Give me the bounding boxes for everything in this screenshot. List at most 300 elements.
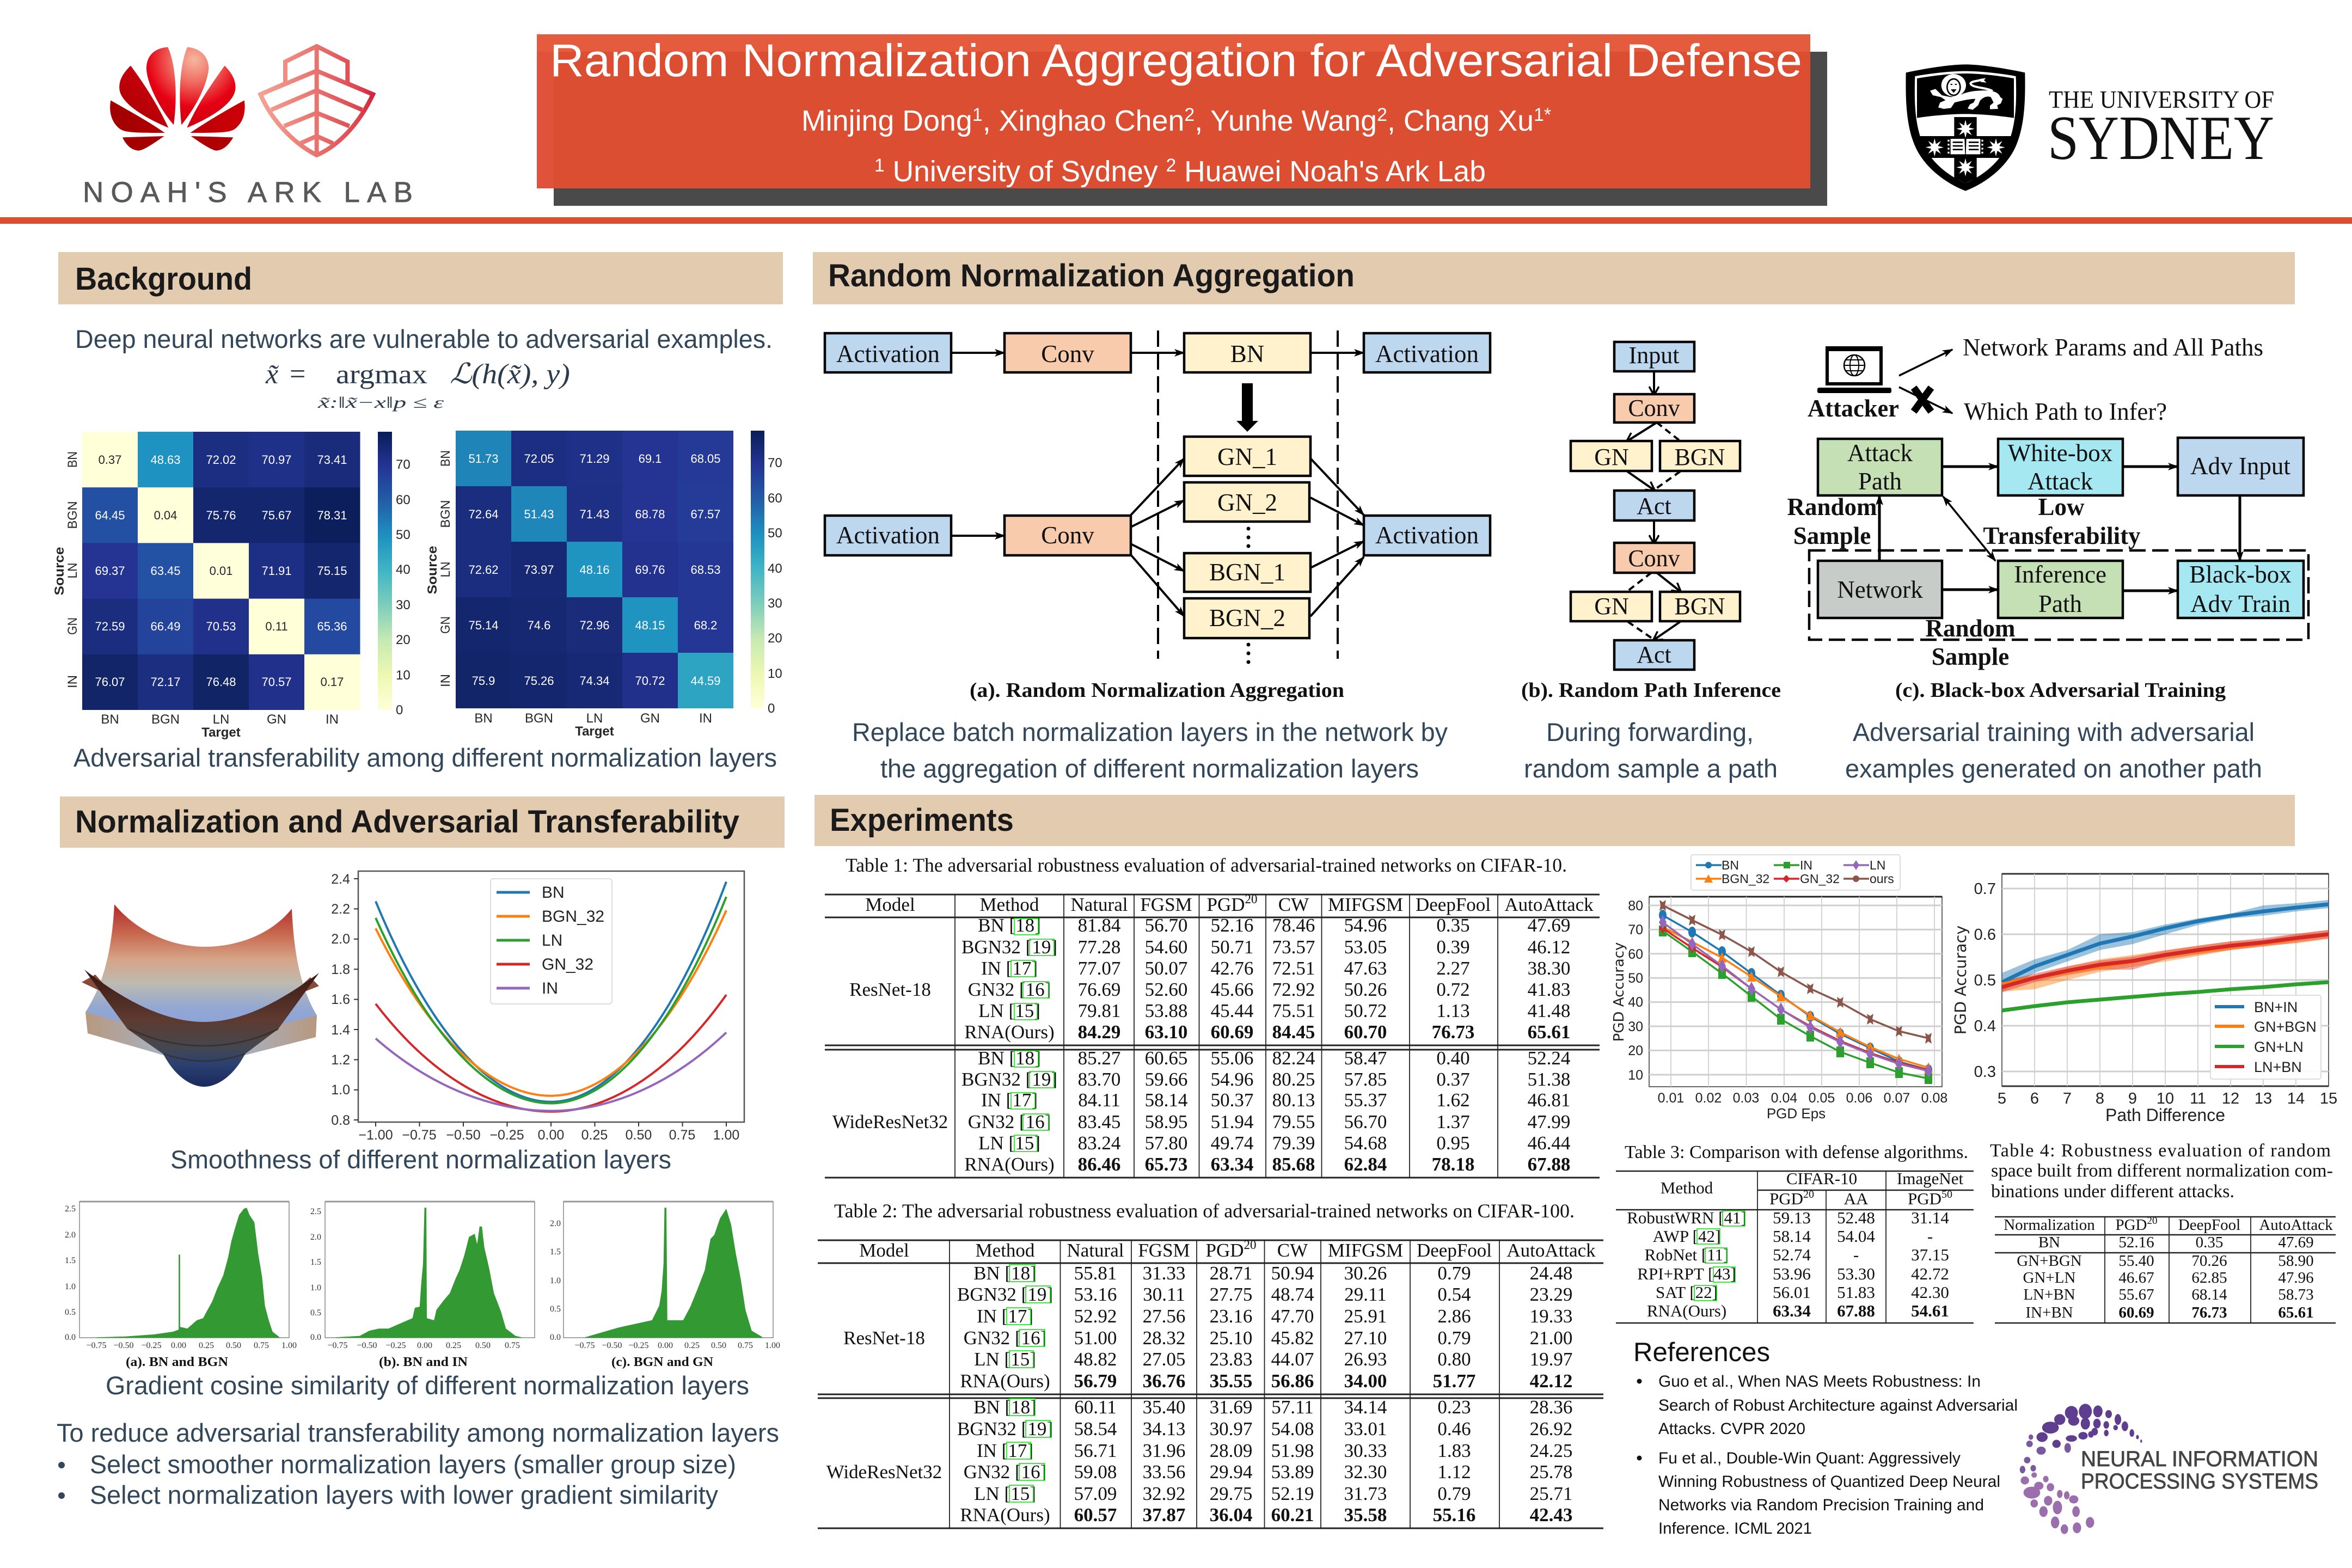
table 2: 31.33 xyxy=(1143,1263,1185,1284)
legend: LN xyxy=(542,932,562,950)
table 1: IN [17] xyxy=(981,1089,1038,1111)
table 1: FGSM xyxy=(1140,894,1192,915)
colorbar: 70 xyxy=(768,456,782,470)
heatmap: right: 75.9 xyxy=(472,674,495,688)
table 2: 24.25 xyxy=(1530,1440,1572,1461)
table 1: 84.29 xyxy=(1078,1021,1120,1043)
table 1: PGD xyxy=(1206,894,1245,915)
heatmap: left: BGN xyxy=(65,501,80,529)
table 2: AutoAttack xyxy=(1506,1240,1596,1261)
histogram c: 0.50 xyxy=(711,1341,726,1350)
table 2: 42.43 xyxy=(1530,1504,1572,1526)
table 2: 45.82 xyxy=(1271,1327,1314,1349)
table 1: 53.88 xyxy=(1145,1000,1187,1021)
legend: GN_32 xyxy=(542,955,593,973)
diagram c: black-box adversarial training: Adv Input xyxy=(2190,452,2290,480)
table 1: 58.14 xyxy=(1145,1089,1187,1111)
histogram c: 0.5 xyxy=(550,1304,561,1314)
line chart: PGD accuracy vs path difference: 8 xyxy=(2096,1090,2104,1107)
heatmap: left: 71.91 xyxy=(261,564,292,578)
diagram a: normalization aggregation: Activation xyxy=(836,522,940,549)
legend: GN_32 xyxy=(1800,872,1840,886)
caption: Adversarial transferability among different normalization layers xyxy=(74,743,777,772)
histogram b: 0.75 xyxy=(505,1341,520,1350)
histogram a: 1.00 xyxy=(281,1341,297,1350)
histogram c: 0.25 xyxy=(684,1341,700,1350)
table 1: 62.84 xyxy=(1344,1154,1387,1175)
table 1: 54.96 xyxy=(1344,915,1387,936)
table 1: 51.94 xyxy=(1211,1111,1253,1132)
legend: BN xyxy=(542,884,565,902)
table 1: 0.95 xyxy=(1436,1132,1470,1154)
legend: BGN_32 xyxy=(542,908,604,926)
table 2: Natural xyxy=(1067,1240,1124,1261)
diagram b: random path inference xyxy=(1521,342,1781,702)
histogram c: 0.75 xyxy=(738,1341,753,1350)
table 2: 37.87 xyxy=(1143,1504,1185,1526)
icon: cross xyxy=(1914,388,1931,412)
logo: University of Sydney xyxy=(1906,64,2274,191)
heatmap: right: GN xyxy=(438,616,453,634)
authors: 2 xyxy=(1184,105,1195,125)
heatmap: right: Source xyxy=(425,546,440,595)
diagram a: normalization aggregation: BGN_2 xyxy=(1209,604,1285,632)
authors: 1 xyxy=(972,105,983,125)
heatmap: right: 72.62 xyxy=(468,563,499,577)
table 1: 67.88 xyxy=(1528,1154,1570,1175)
heatmap: right: 48.16 xyxy=(579,563,610,577)
table 2: 57.11 xyxy=(1271,1396,1314,1418)
heatmap: left: 65.36 xyxy=(317,620,347,633)
line chart: PGD accuracy vs eps: 0.07 xyxy=(1884,1091,1910,1106)
description b xyxy=(1524,718,1778,783)
table 4: 68.14 xyxy=(2191,1286,2227,1303)
references: Attacks. CVPR 2020 xyxy=(1658,1420,1805,1438)
heatmap: right: 72.64 xyxy=(468,507,499,521)
references: Inference. ICML 2021 xyxy=(1658,1520,1812,1538)
heading bar xyxy=(813,252,2295,304)
table 2: 25.10 xyxy=(1210,1327,1252,1349)
table 1: 52.60 xyxy=(1145,979,1187,1000)
diagram c: black-box adversarial training: Network xyxy=(1837,576,1923,603)
table 1: BGN32 [19] xyxy=(961,936,1057,958)
table 2: 0.79 xyxy=(1437,1263,1471,1284)
table 4: 62.85 xyxy=(2191,1269,2227,1287)
table 2: LN [15] xyxy=(974,1349,1036,1370)
line chart: PGD accuracy vs path difference: 14 xyxy=(2287,1090,2305,1107)
table 1: 77.28 xyxy=(1078,936,1120,958)
legend: LN+BN xyxy=(2254,1059,2302,1075)
table 1: MIFGSM xyxy=(1328,894,1403,915)
table 3: 58.14 xyxy=(1773,1227,1811,1246)
table 4: 46.67 xyxy=(2118,1269,2154,1287)
table 2: DeepFool xyxy=(1417,1240,1492,1261)
caption c: (c). BGN and GN xyxy=(611,1355,714,1369)
heatmap: right: 75.14 xyxy=(468,618,499,632)
table 3: 54.61 xyxy=(1911,1301,1949,1320)
colorbar: 60 xyxy=(396,493,411,507)
heatmap: right: Target xyxy=(575,724,614,739)
table 3: - xyxy=(1853,1245,1859,1264)
authors: , Chang Xu xyxy=(1387,105,1534,137)
table 1: 63.10 xyxy=(1145,1021,1187,1043)
table 2: 50.94 xyxy=(1271,1263,1314,1284)
table 2: PGD xyxy=(1205,1240,1244,1261)
table 1: 56.70 xyxy=(1344,1111,1387,1132)
table 2: 23.83 xyxy=(1210,1349,1252,1370)
colorbar xyxy=(378,432,411,718)
line chart: smoothness: 0.75 xyxy=(669,1128,695,1143)
table 1: 54.96 xyxy=(1211,1069,1253,1090)
takeaways: Select smoother normalization layers (smaller group size) xyxy=(90,1450,736,1479)
heatmap: left: IN xyxy=(65,675,80,688)
table 1: Natural xyxy=(1071,894,1128,915)
heatmap: right: 72.05 xyxy=(524,452,554,465)
legend: IN xyxy=(542,979,558,997)
heatmap: left: 70.97 xyxy=(261,453,292,467)
table 2: 28.36 xyxy=(1530,1396,1572,1418)
logo: University of Sydney: SYDNEY xyxy=(2048,103,2274,173)
heatmap: right: 72.96 xyxy=(579,618,610,632)
histogram a: 1.0 xyxy=(65,1282,76,1291)
table 1 caption: Table 1: The adversarial robustness evaluation of adversarial-trained networks on CIFAR-10. xyxy=(846,854,1567,876)
table 2: 27.75 xyxy=(1210,1284,1252,1305)
table 3: AWP [42] xyxy=(1653,1227,1720,1246)
table 4 caption: binations under different attacks. xyxy=(1991,1181,2234,1202)
table 2: 30.97 xyxy=(1210,1418,1252,1440)
table 2: BN [18] xyxy=(973,1263,1037,1284)
table 2: 1.83 xyxy=(1437,1440,1471,1461)
table 1: 80.13 xyxy=(1272,1089,1315,1111)
histogram c: −0.75 xyxy=(574,1341,595,1350)
table 2: 28.09 xyxy=(1210,1440,1252,1461)
histogram a: −0.75 xyxy=(86,1341,107,1350)
diagram c: black-box adversarial training xyxy=(1787,334,2308,702)
table 1: ResNet-18 xyxy=(849,979,931,1000)
logo text xyxy=(2081,1447,2318,1493)
intro text: Deep neural networks are vulnerable to adversarial examples. xyxy=(75,324,773,353)
table 4 caption: Table 4: Robustness evaluation of random xyxy=(1990,1141,2331,1161)
line chart: PGD accuracy vs path difference: 0.5 xyxy=(1974,972,1996,989)
description c: Adversarial training with adversarial xyxy=(1853,718,2255,746)
histogram b: 2.5 xyxy=(310,1207,321,1216)
table 2: 28.71 xyxy=(1210,1263,1252,1284)
heatmap: left: 64.45 xyxy=(95,509,125,522)
heading bar xyxy=(58,252,783,304)
table 2: 29.94 xyxy=(1210,1461,1252,1483)
table 1: 2.27 xyxy=(1436,958,1470,979)
diagram c: black-box adversarial training: Attacker xyxy=(1808,395,1899,422)
heatmap: right: 69.1 xyxy=(639,452,661,465)
table 1: 0.37 xyxy=(1436,1069,1470,1090)
table 4: LN+BN xyxy=(2023,1286,2075,1303)
legend: GN+BGN xyxy=(2254,1019,2317,1035)
line chart: PGD accuracy vs path difference: 12 xyxy=(2222,1090,2239,1107)
colorbar: 60 xyxy=(768,491,782,506)
diagram b: random path inference: Act xyxy=(1637,493,1671,519)
line chart: smoothness: 2.4 xyxy=(331,872,350,887)
table 2 caption: Table 2: The adversarial robustness evaluation of adversarial-trained networks on CIFAR-100. xyxy=(834,1200,1575,1222)
table 3: 20 xyxy=(1803,1189,1814,1200)
heatmap: left: 72.17 xyxy=(150,675,181,689)
table 2: 59.08 xyxy=(1074,1461,1117,1483)
diagram a: normalization aggregation: GN_1 xyxy=(1217,443,1277,470)
line chart: smoothness: 1.00 xyxy=(713,1128,739,1143)
histogram b: 1.5 xyxy=(310,1258,321,1267)
table 1: LN [15] xyxy=(978,1000,1040,1021)
table 4: 47.96 xyxy=(2278,1269,2314,1287)
line chart: smoothness: 0.50 xyxy=(626,1128,652,1143)
histogram a: 0.5 xyxy=(65,1308,76,1317)
references: References xyxy=(1633,1338,1770,1367)
heatmap: left: 0.11 xyxy=(265,620,288,633)
table 3: 37.15 xyxy=(1911,1245,1949,1264)
table 2: 54.08 xyxy=(1271,1418,1314,1440)
table 1: CW xyxy=(1278,894,1309,915)
table 3 xyxy=(1616,1142,1974,1323)
line chart: PGD accuracy vs path difference: 15 xyxy=(2320,1090,2337,1107)
table 4: 76.73 xyxy=(2191,1304,2227,1321)
legend xyxy=(491,879,612,1004)
table 2: 0.23 xyxy=(1437,1396,1471,1418)
table 2: 25.71 xyxy=(1530,1483,1572,1504)
line chart: smoothness: −0.75 xyxy=(402,1128,437,1143)
heatmap: right: 48.15 xyxy=(635,618,665,632)
table 1: 46.12 xyxy=(1528,936,1570,958)
line chart: PGD accuracy vs eps: 50 xyxy=(1628,971,1643,986)
table 1: 52.24 xyxy=(1528,1048,1570,1069)
table 2: 51.00 xyxy=(1074,1327,1117,1349)
table 2: 26.92 xyxy=(1530,1418,1572,1440)
table 4: 20 xyxy=(2147,1215,2158,1227)
colorbar: 50 xyxy=(396,528,411,542)
histogram b: −0.50 xyxy=(357,1341,377,1350)
table 2: 51.77 xyxy=(1433,1370,1475,1392)
panel: experiments xyxy=(814,795,2337,1538)
table 4: 55.40 xyxy=(2118,1252,2154,1270)
table 2: 33.56 xyxy=(1143,1461,1185,1483)
line chart: PGD accuracy vs eps: 0.06 xyxy=(1846,1091,1872,1106)
histogram a xyxy=(65,1202,297,1369)
formula xyxy=(265,359,570,412)
table 1: 72.92 xyxy=(1272,979,1315,1000)
heatmap: left: 70.53 xyxy=(206,620,236,633)
table 4 caption xyxy=(1990,1141,2333,1202)
diagram c: black-box adversarial training: Low xyxy=(2038,493,2085,520)
affiliations: 2 xyxy=(1166,155,1176,176)
description a: Replace batch normalization layers in the network by xyxy=(852,718,1448,746)
table 2: 35.55 xyxy=(1210,1370,1252,1392)
table 1: 0.39 xyxy=(1436,936,1470,958)
diagram b: random path inference: Act xyxy=(1637,641,1671,668)
formula: = xyxy=(290,359,305,390)
heatmap: right: BGN xyxy=(438,500,453,528)
table 2: MIFGSM xyxy=(1328,1240,1403,1261)
table 2: 19.33 xyxy=(1530,1306,1572,1327)
takeaways: To reduce adversarial transferability among normalization layers xyxy=(57,1418,779,1447)
table 4: 65.61 xyxy=(2278,1304,2314,1321)
training flow xyxy=(1809,550,2308,640)
histogram c: 1.00 xyxy=(765,1341,780,1350)
line chart: PGD accuracy vs eps: 60 xyxy=(1628,947,1643,962)
table 1: 47.99 xyxy=(1528,1111,1570,1132)
table 1: 41.48 xyxy=(1528,1000,1570,1021)
line chart: PGD accuracy vs path difference: Path Difference xyxy=(2105,1105,2225,1125)
table 1: 84.45 xyxy=(1272,1021,1315,1043)
heatmap: right: 44.59 xyxy=(690,674,721,688)
table 1: 58.47 xyxy=(1344,1048,1387,1069)
description a xyxy=(852,718,1448,783)
arrow: attacker knows params xyxy=(1899,350,1952,376)
diagram c: black-box adversarial training: Network Params and All Paths xyxy=(1963,334,2263,361)
histogram b: 0.0 xyxy=(310,1333,321,1342)
table 2: BN [18] xyxy=(973,1396,1037,1418)
heatmap: left: 72.59 xyxy=(95,620,125,633)
line chart: PGD accuracy vs eps: 20 xyxy=(1628,1043,1643,1058)
histogram a: 2.5 xyxy=(65,1204,76,1214)
table 3: RobustWRN [41] xyxy=(1627,1208,1747,1227)
references: Guo et al., When NAS Meets Robustness: In xyxy=(1658,1373,1981,1391)
diagram c: black-box adversarial training: Inference xyxy=(2014,561,2106,588)
line chart: PGD accuracy vs path difference: 0.6 xyxy=(1974,926,1996,944)
colorbar: 10 xyxy=(396,668,411,683)
line chart: smoothness: 0.00 xyxy=(538,1128,564,1143)
table 3: RNA(Ours) xyxy=(1647,1301,1726,1320)
table 2: 21.00 xyxy=(1530,1327,1572,1349)
references: Search of Robust Architecture against Adversarial xyxy=(1658,1396,2018,1414)
table 1: 77.07 xyxy=(1078,958,1120,979)
table 1: 85.27 xyxy=(1078,1048,1120,1069)
table 2: 27.10 xyxy=(1344,1327,1387,1349)
line chart: smoothness: 2.0 xyxy=(331,932,350,947)
table 2: 29.11 xyxy=(1344,1284,1387,1305)
heatmap: left: 76.48 xyxy=(206,675,236,689)
formula: ℒ(h(x̃), y) xyxy=(450,359,570,390)
table 3: CIFAR-10 xyxy=(1786,1169,1857,1188)
heatmap: left: Source xyxy=(52,547,67,596)
histogram b: 0.50 xyxy=(475,1341,491,1350)
table 2: 56.86 xyxy=(1271,1370,1314,1392)
table 1: 50.07 xyxy=(1145,958,1187,979)
line chart: PGD accuracy vs eps: 0.02 xyxy=(1695,1091,1722,1106)
colorbar: 70 xyxy=(396,457,411,472)
line chart: smoothness: 0.25 xyxy=(581,1128,608,1143)
heading: Experiments xyxy=(830,803,1014,838)
caption b: (b). Random Path Inference xyxy=(1521,679,1781,702)
histogram c: −0.25 xyxy=(628,1341,649,1350)
table 2: 34.14 xyxy=(1344,1396,1387,1418)
table 2: 26.93 xyxy=(1344,1349,1387,1370)
table 1: 59.66 xyxy=(1145,1069,1187,1090)
3d loss surface xyxy=(82,904,319,1087)
table 1: 47.63 xyxy=(1344,958,1387,979)
histogram b: −0.75 xyxy=(327,1341,348,1350)
table 4: 60.69 xyxy=(2118,1304,2154,1321)
legend: BN xyxy=(1722,858,1739,872)
references: Networks via Random Precision Training and xyxy=(1658,1496,1984,1514)
table 2: BGN32 [19] xyxy=(957,1418,1053,1440)
table 3 caption: Table 3: Comparison with defense algorithms. xyxy=(1625,1142,1968,1162)
diagram c: black-box adversarial training: Sample xyxy=(1793,522,1871,549)
line chart: smoothness: −1.00 xyxy=(358,1128,393,1143)
table 1: 86.46 xyxy=(1078,1154,1120,1175)
table 2: 29.75 xyxy=(1210,1483,1252,1504)
references: Winning Robustness of Quantized Deep Neural xyxy=(1658,1473,2000,1491)
table 2: 31.73 xyxy=(1344,1483,1387,1504)
table 4 xyxy=(1990,1141,2336,1323)
table 1: 57.80 xyxy=(1145,1132,1187,1154)
table 1: 82.24 xyxy=(1272,1048,1315,1069)
line chart: PGD accuracy vs eps: 30 xyxy=(1628,1019,1643,1034)
table 1: Model xyxy=(865,894,915,915)
table 1: 1.37 xyxy=(1436,1111,1470,1132)
table 3: PGD xyxy=(1769,1189,1803,1208)
legend xyxy=(1691,855,1900,890)
description a: the aggregation of different normalization layers xyxy=(880,754,1419,783)
heatmap: right: LN xyxy=(586,711,603,726)
table 4: 0.35 xyxy=(2196,1234,2223,1251)
table 2: 30.11 xyxy=(1143,1284,1185,1305)
table 1: 79.55 xyxy=(1272,1111,1315,1132)
heatmap: right: 69.76 xyxy=(635,563,665,577)
header band xyxy=(0,34,2352,224)
diagram b: random path inference: GN xyxy=(1594,444,1629,470)
caption b: (b). BN and IN xyxy=(379,1355,468,1369)
table 2: LN [15] xyxy=(974,1483,1036,1504)
line chart: smoothness: 1.8 xyxy=(331,962,350,977)
table 1: 1.62 xyxy=(1436,1089,1470,1111)
table 3: RPI+RPT [43] xyxy=(1637,1264,1736,1283)
table 3: 63.34 xyxy=(1773,1301,1811,1320)
table 2: 0.80 xyxy=(1437,1349,1471,1370)
heatmap: left: 70.57 xyxy=(261,675,292,689)
table 2: 47.70 xyxy=(1271,1306,1314,1327)
logo: NeurIPS xyxy=(2020,1404,2318,1534)
table 2: 34.13 xyxy=(1143,1418,1185,1440)
diagram c: black-box adversarial training: Path xyxy=(2038,590,2082,617)
table 1: 60.70 xyxy=(1344,1021,1387,1043)
table 2: 60.57 xyxy=(1074,1504,1117,1526)
heatmap: left: LN xyxy=(213,712,229,727)
table 2: IN [17] xyxy=(977,1440,1033,1461)
diagram c: black-box adversarial training: Path xyxy=(1858,468,1902,495)
table 1: IN [17] xyxy=(981,958,1038,979)
title shadow xyxy=(554,52,1827,206)
line chart: smoothness: 1.4 xyxy=(331,1022,350,1038)
diagram a: normalization aggregation: Activation xyxy=(836,340,940,367)
diagram a: normalization aggregation: Conv xyxy=(1041,522,1094,549)
table 2: IN [17] xyxy=(977,1306,1033,1327)
histogram a: −0.25 xyxy=(141,1341,162,1350)
table 2: 27.05 xyxy=(1143,1349,1185,1370)
table 3: 42.72 xyxy=(1911,1264,1949,1283)
heatmap: right: 71.29 xyxy=(579,452,610,465)
table 1: 56.70 xyxy=(1145,915,1187,936)
lion xyxy=(1941,74,1966,96)
table 1: 60.69 xyxy=(1211,1021,1253,1043)
table 1: BN [18] xyxy=(978,1048,1041,1069)
line chart: PGD accuracy vs eps: 40 xyxy=(1628,995,1643,1010)
table 2: 51.98 xyxy=(1271,1440,1314,1461)
table 1: 79.81 xyxy=(1078,1000,1120,1021)
heatmap: right: BGN xyxy=(525,711,553,726)
table 1: 85.68 xyxy=(1272,1154,1315,1175)
table 2: 30.33 xyxy=(1344,1440,1387,1461)
table 1: 72.51 xyxy=(1272,958,1315,979)
diagram c: black-box adversarial training: Random xyxy=(1787,493,1877,520)
table 1: Method xyxy=(980,894,1039,915)
line chart: PGD accuracy vs path difference: 0.4 xyxy=(1974,1018,1996,1035)
